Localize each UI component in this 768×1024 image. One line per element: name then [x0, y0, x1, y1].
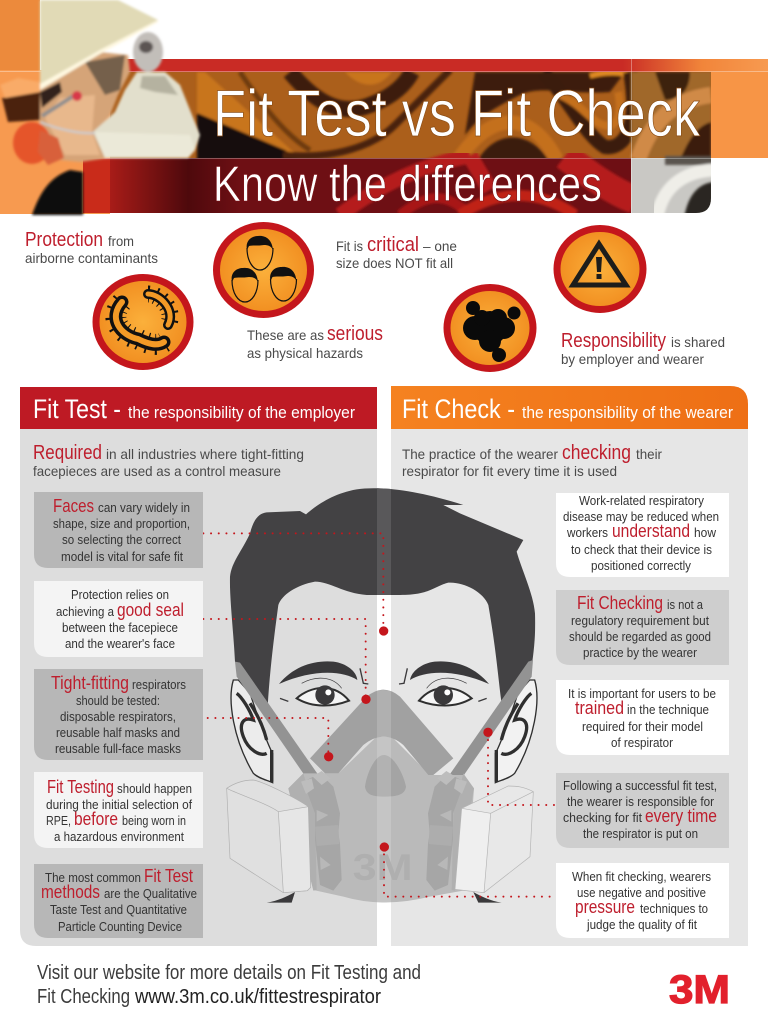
box: trained — [556, 680, 729, 755]
callout: serious: serious — [327, 323, 383, 345]
box: test methods: methods — [41, 882, 100, 902]
intro: checking: checking — [562, 442, 631, 464]
box: good seal: achieving a — [56, 605, 114, 619]
box: tight-fitting: disposable respirators, — [60, 710, 176, 724]
callout: critical — [336, 234, 457, 271]
callout: responsibility: by employer and wearer — [561, 351, 704, 367]
intro: checking: The practice of the wearer — [402, 446, 558, 462]
box: faces: shape, size and proportion, — [53, 517, 190, 531]
heading: fit check — [391, 386, 748, 429]
intro: required — [33, 442, 304, 479]
box: test methods — [34, 864, 203, 938]
callout: protection — [25, 229, 158, 266]
box: every time: the wearer is responsible for — [567, 795, 714, 809]
box: faces: so selecting the correct — [62, 533, 181, 547]
heading: fit check: the responsibility of the wearer — [522, 403, 733, 422]
logo: 3M: 3M — [669, 968, 730, 1012]
callout: critical: critical — [367, 234, 419, 256]
footer text: Visit our website for more details on Fit Testing and — [37, 962, 421, 984]
intro: checking — [402, 442, 662, 479]
filter straps — [267, 892, 502, 903]
box: fit checking — [556, 590, 729, 665]
box: fit testing: being worn in — [122, 814, 186, 828]
subtitle: Know the differences — [213, 156, 602, 212]
box: pressure: judge the quality of fit — [586, 918, 697, 932]
left eye and brow — [279, 661, 368, 706]
intro: required: in all industries where tight-fitting — [106, 446, 304, 462]
callout: protection: airborne contaminants — [25, 250, 158, 266]
box: good seal: between the facepiece — [62, 621, 178, 635]
box: good seal: good seal — [117, 600, 184, 620]
box: test methods: are the Qualitative — [104, 887, 197, 901]
panel: fit test — [20, 387, 377, 946]
box: fit checking: regulatory requirement but — [571, 614, 709, 628]
callout: protection: from — [108, 233, 134, 249]
box: tight-fitting: should be tested: — [76, 694, 160, 708]
box: good seal: and the wearer's face — [65, 637, 175, 651]
callout: responsibility: is shared — [671, 334, 725, 350]
callout: critical: size does NOT fit all — [336, 255, 453, 271]
mask side clips — [301, 771, 467, 891]
heading: fit test — [20, 387, 377, 429]
callout: critical: Fit is — [336, 238, 363, 254]
box: every time — [556, 773, 729, 848]
box: trained: trained — [575, 698, 624, 718]
heading: fit check: Fit Check - — [402, 394, 515, 424]
callout: responsibility — [561, 330, 725, 367]
box: test methods: Fit Test — [144, 866, 193, 886]
box: fit testing: should happen — [117, 782, 192, 796]
panel: fit check — [391, 386, 748, 946]
footer text: www.3m.co.uk/fittestrespirator — [134, 986, 381, 1008]
ears — [231, 680, 537, 783]
intro: required: facepieces are used as a control measure — [33, 463, 281, 479]
box: good seal: Protection relies on — [71, 588, 169, 602]
icon: dust cloud — [447, 288, 533, 368]
box: pressure — [556, 863, 729, 938]
box: tight-fitting: reusable full-face masks — [55, 742, 181, 756]
box: trained: of respirator — [611, 736, 673, 750]
callout: serious: These are as — [247, 327, 324, 343]
box: faces: can vary widely in — [98, 501, 190, 515]
box: fit testing: a hazardous environment — [54, 830, 184, 844]
intro: checking: respirator for fit every time it is used — [402, 463, 617, 479]
box: faces — [34, 492, 203, 568]
box: trained: It is important for users to be — [568, 687, 716, 701]
box: faces: Faces — [53, 496, 94, 516]
box: tight-fitting: Tight-fitting — [51, 673, 129, 693]
intro: checking: their — [636, 446, 662, 462]
box: pressure: When fit checking, wearers — [572, 870, 711, 884]
box: understand: positioned correctly — [591, 559, 692, 573]
box: understand: to check that their device is — [571, 543, 712, 557]
right eye and brow — [399, 661, 489, 706]
box: understand: workers — [566, 526, 608, 540]
hair — [227, 483, 540, 710]
box: pressure: use negative and positive — [577, 886, 706, 900]
box: good seal — [34, 581, 203, 657]
box: fit checking: Fit Checking — [577, 593, 663, 613]
box: understand — [556, 493, 729, 577]
callout: critical: – one — [423, 238, 457, 254]
heading: fit test: Fit Test - — [33, 394, 121, 424]
box: every time: every time — [645, 806, 717, 826]
half mask body — [288, 680, 474, 907]
footer text — [37, 962, 421, 1008]
box: fit testing — [34, 772, 203, 848]
box: fit checking: should be regarded as good — [569, 630, 711, 644]
dotted leader lines — [200, 533, 556, 897]
callout: serious: as physical hazards — [247, 345, 363, 361]
box: faces: model is vital for safe fit — [61, 550, 183, 564]
box: every time: checking for fit — [563, 811, 643, 825]
box: tight-fitting: reusable half masks and — [56, 726, 180, 740]
box: test methods: Taste Test and Quantitative — [50, 903, 187, 917]
box: tight-fitting: respirators — [132, 678, 186, 692]
box: fit testing: RPE, — [46, 814, 71, 828]
callout: protection: Protection — [25, 229, 103, 251]
callout: responsibility: Responsibility — [561, 330, 666, 352]
box: test methods: The most common — [45, 871, 141, 885]
red marker dots — [324, 626, 493, 852]
header banner — [0, 0, 768, 218]
box: pressure: pressure — [575, 897, 635, 917]
box: every time: Following a successful fit test, — [563, 779, 717, 793]
box: understand: how — [694, 526, 717, 540]
heading: fit test: the responsibility of the employer — [128, 403, 355, 422]
illustration: face with respirator — [200, 483, 556, 907]
box: understand: disease may be reduced when — [563, 510, 719, 524]
box: fit testing: during the initial selection of — [46, 798, 192, 812]
box: test methods: Particle Counting Device — [58, 920, 182, 934]
right filter cartridge — [455, 786, 533, 893]
callout: serious — [247, 323, 383, 361]
box: fit testing: before — [74, 809, 118, 829]
mask straps — [235, 660, 533, 778]
worker photo — [0, 0, 200, 215]
mask logo: 3M — [353, 847, 413, 888]
box: understand: understand — [612, 521, 690, 541]
box: fit checking: is not a — [667, 598, 703, 612]
box: tight-fitting — [34, 669, 203, 760]
box: trained: required for their model — [582, 720, 703, 734]
left filter cartridge — [227, 780, 311, 893]
icon: three faces — [216, 226, 310, 314]
icon: warning triangle — [557, 228, 643, 310]
intro: required: Required — [33, 442, 102, 464]
box: understand: Work-related respiratory — [579, 494, 705, 508]
icon: bacteria — [96, 278, 190, 366]
box: every time: the respirator is put on — [583, 827, 698, 841]
box: fit testing: Fit Testing — [47, 777, 114, 797]
box: fit checking: practice by the wearer — [583, 646, 697, 660]
footer text: Fit Checking — [37, 986, 130, 1008]
box: trained: in the technique — [627, 703, 709, 717]
swirl artwork — [110, 70, 715, 218]
box: pressure: techniques to — [640, 902, 708, 916]
